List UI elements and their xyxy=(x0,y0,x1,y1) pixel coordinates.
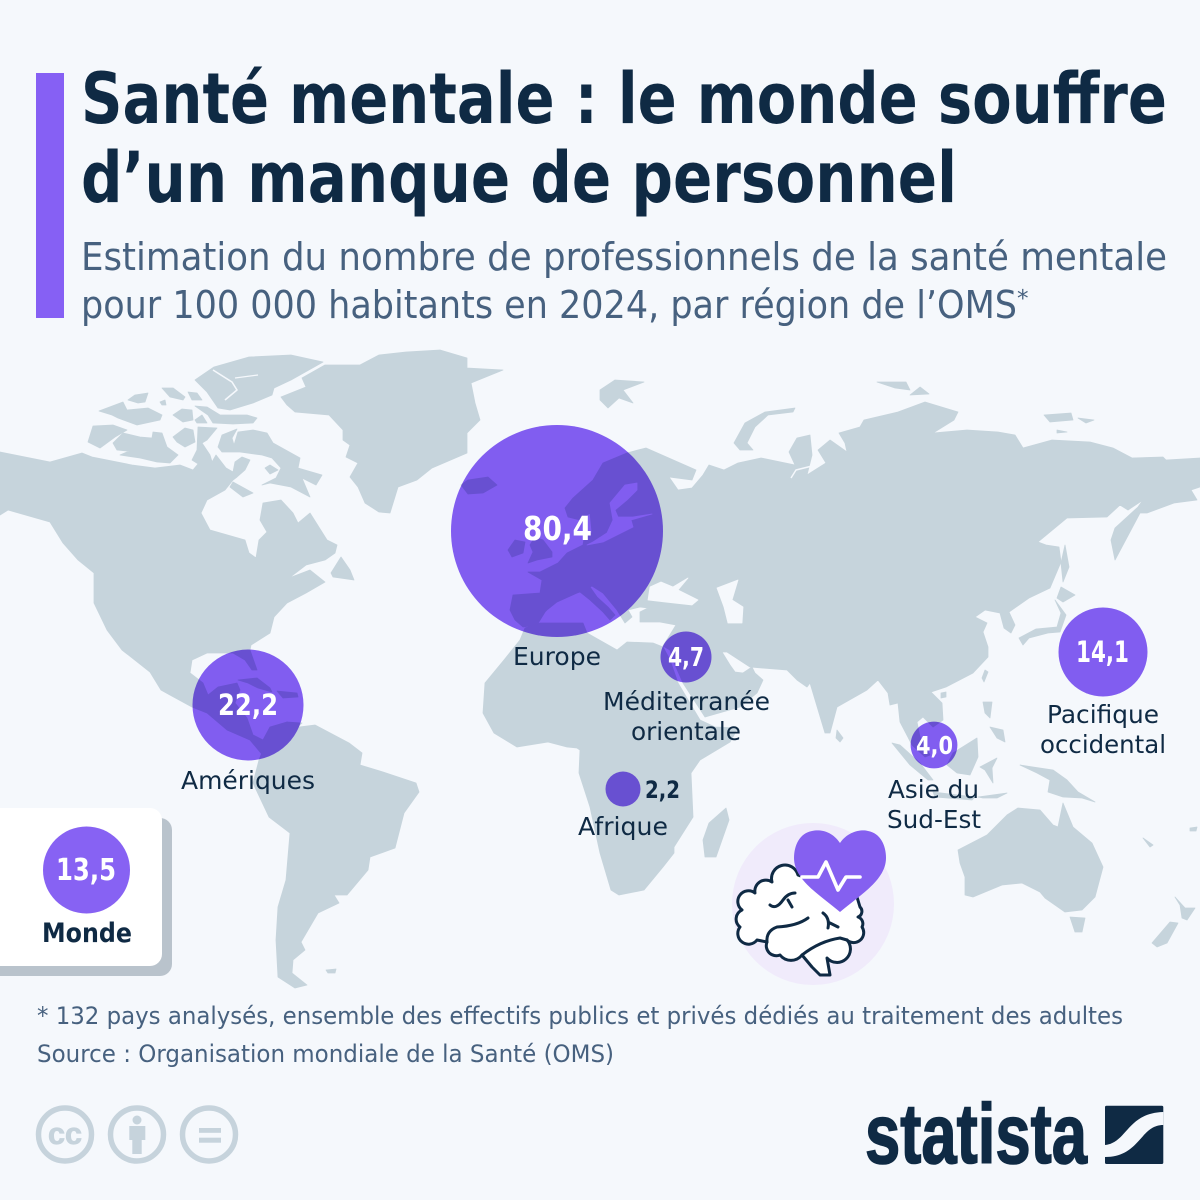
title xyxy=(81,58,1167,219)
Eurasia xyxy=(510,402,1200,757)
South America xyxy=(253,722,419,988)
value: Asie du Sud-Est: 4,0 xyxy=(916,731,953,760)
logo mark xyxy=(1105,1106,1163,1164)
value: Amériques: 22,2 xyxy=(218,688,278,722)
label: Amériques: Amériques xyxy=(181,766,315,795)
accent bar xyxy=(36,73,64,318)
pulse line xyxy=(802,862,860,890)
Southeast Asia islands xyxy=(836,702,1095,802)
bubble: Afrique xyxy=(606,772,640,806)
bubble: Europe xyxy=(451,425,663,637)
label: Asie du Sud-Est xyxy=(887,775,981,834)
icon: no derivatives xyxy=(182,1108,236,1161)
label: Asie du Sud-Est: Asie du xyxy=(888,775,979,804)
label: Europe: Europe xyxy=(513,642,601,671)
label: Monde: Monde xyxy=(42,918,132,949)
value: Europe: 80,4 xyxy=(523,509,592,548)
Greenland xyxy=(281,350,503,513)
label: Afrique: Afrique xyxy=(578,812,668,841)
Newfoundland xyxy=(331,557,354,580)
Australia and Oceania xyxy=(326,803,1197,973)
icon: brain and heart xyxy=(732,823,894,985)
title: d’un manque de personnel xyxy=(81,137,957,219)
Iceland xyxy=(461,477,497,494)
Caribbean xyxy=(238,678,298,698)
panel: world value card xyxy=(0,808,172,976)
brain xyxy=(736,865,864,975)
Madagascar xyxy=(703,808,729,857)
icon: creative commons xyxy=(38,1108,92,1161)
bubble: Asie du Sud-Est xyxy=(911,722,957,768)
bubbles xyxy=(192,425,1148,806)
icon: creative commons: cc xyxy=(48,1116,82,1151)
Great Britain and Ireland xyxy=(508,537,552,563)
bubble: Amériques xyxy=(192,650,304,760)
world map xyxy=(0,350,1200,988)
label: Pacifique occidental: occidental xyxy=(1040,730,1166,759)
subtitle: pour 100 000 habitants en 2024, par région de l’OMS xyxy=(81,283,1017,327)
subtitle: * xyxy=(1017,286,1028,312)
label: Méditerranée orientale: orientale xyxy=(631,717,741,746)
label: Asie du Sud-Est: Sud-Est xyxy=(887,805,981,834)
Arctic Eurasian islands xyxy=(600,380,1094,450)
Africa xyxy=(483,623,738,895)
bubble: Pacifique occidental xyxy=(1058,608,1148,696)
value: Méditerranée orientale: 4,7 xyxy=(668,643,704,673)
subtitle xyxy=(81,235,1167,327)
Canadian Arctic islands xyxy=(88,355,323,497)
footnote: * 132 pays analysés, ensemble des effectifs publics et privés dédiés au traitement des adultes xyxy=(37,1002,1123,1030)
logo: statista: statista xyxy=(865,1087,1088,1181)
value: Pacifique occidental: 14,1 xyxy=(1076,635,1129,669)
bubble: Méditerranée orientale xyxy=(660,632,712,682)
value: Monde: 13,5 xyxy=(56,853,116,888)
label: Pacifique occidental: Pacifique xyxy=(1047,700,1159,729)
inland seas xyxy=(213,370,812,623)
source: Source : Organisation mondiale de la Santé (OMS) xyxy=(37,1040,614,1068)
label: Méditerranée orientale xyxy=(603,687,770,746)
label: Méditerranée orientale: Méditerranée xyxy=(603,687,770,716)
icon: attribution xyxy=(110,1108,164,1161)
value: Afrique: 2,2 xyxy=(645,776,680,804)
heart xyxy=(794,830,886,912)
North and Central America xyxy=(0,452,337,758)
bubble: Monde xyxy=(43,826,130,914)
label: Pacifique occidental xyxy=(1040,700,1166,759)
Japan, Sakhalin, Taiwan xyxy=(941,545,1075,698)
